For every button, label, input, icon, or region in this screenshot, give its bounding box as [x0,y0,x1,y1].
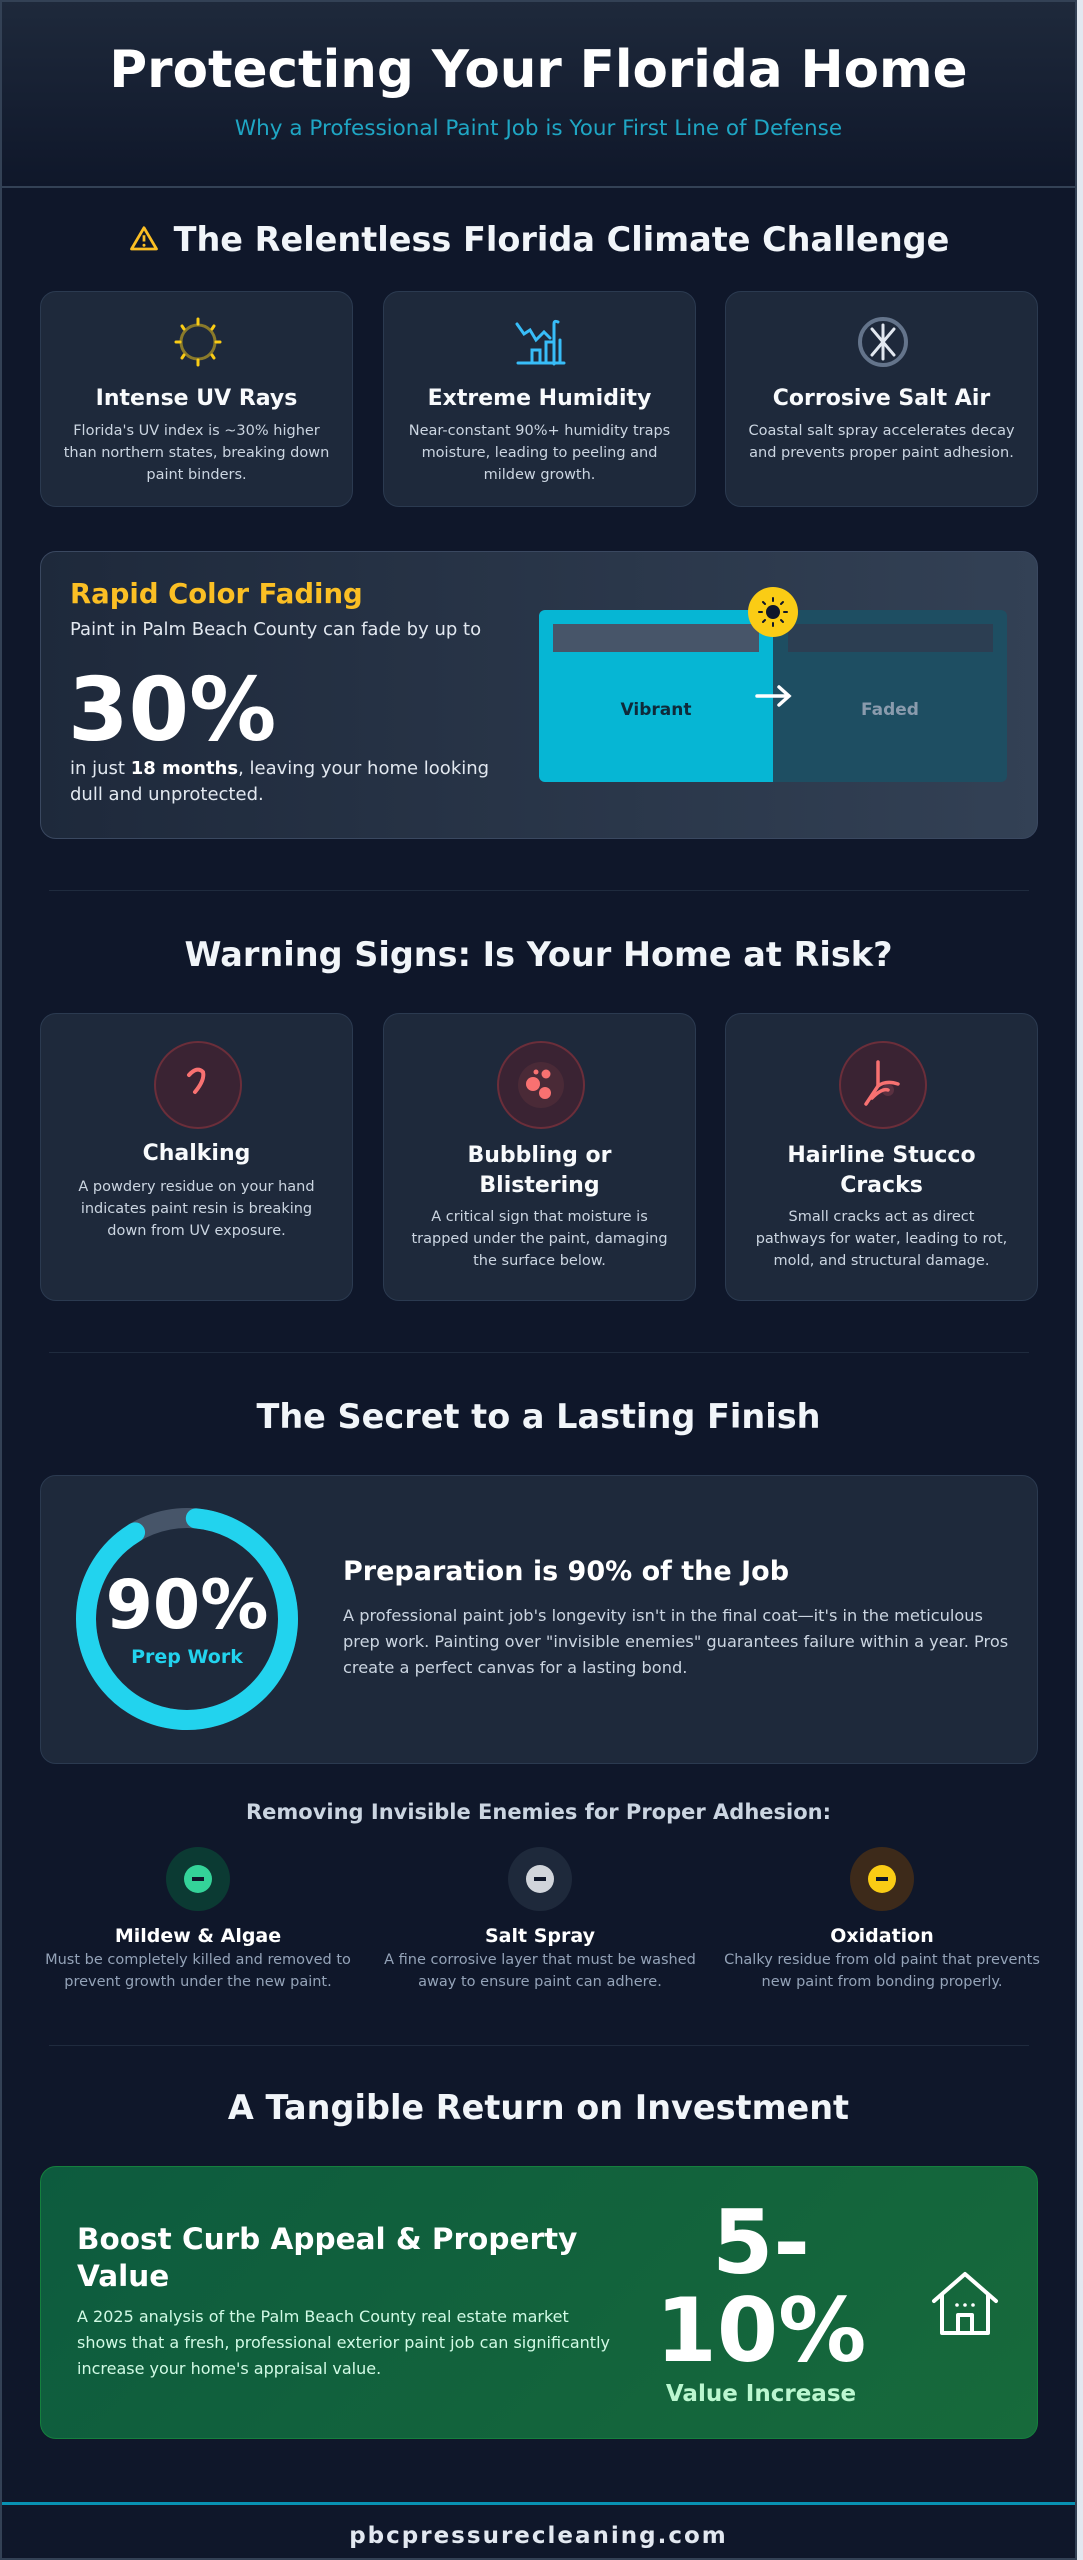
icon: green minus [166,1847,230,1911]
icon: sun badge [748,587,798,637]
label vibrant: Vibrant [621,700,691,720]
donut chart 90%: Prep Work [131,1646,243,1668]
donut chart 90% [76,1508,298,1730]
icon: crack [839,1041,927,1129]
footer: pbcpressurecleaning.com [349,2523,728,2549]
ROI paragraph: A 2025 analysis of the Palm Beach County real estate market shows that a fresh, professional exterior paint job can significantly increase your home's appraisal value. [77,2307,610,2378]
donut label: 90% [106,1566,268,1645]
card: salt air [725,291,1038,507]
card: bubbling: Blistering [479,1173,600,1198]
subtitle: Why a Professional Paint Job is Your First Line of Defense [235,116,842,141]
heading: ROI: A Tangible Return on Investment [228,2088,849,2127]
color swatch comparison [539,587,1007,782]
enemy: salt spray: Salt Spray [485,1925,595,1947]
heading: climate challenge: The Relentless Florida Climate Challenge [174,220,949,259]
subheading: invisible enemies: Removing Invisible Enemies for Proper Adhesion: [246,1800,831,1824]
enemy: oxidation [724,1847,1040,1990]
fading heading: Rapid Color Fading [70,578,363,610]
big stat 5-10%: Value Increase [666,2381,856,2407]
footer [2,2502,1075,2560]
card: salt air: Coastal salt spray accelerates decay and prevents proper paint adhesion. [748,423,1015,461]
icon: gray minus [508,1847,572,1911]
enemy: oxidation: Oxidation [830,1925,934,1947]
card: bubbling: Bubbling or [467,1143,612,1168]
big stat 5-10% [656,2191,866,2407]
big stat 5-10%: 10% [656,2279,866,2382]
icon: yellow minus [850,1847,914,1911]
enemy: mildew: Mildew & Algae [115,1925,281,1947]
enemy: mildew [45,1847,351,1990]
panel: rapid color fading [40,551,1038,839]
icon: salt crystal [858,317,908,367]
icon: sun [174,318,222,366]
card: chalking: A powdery residue on your hand indicates paint resin is breaking down from UV exposure. [78,1179,315,1239]
ROI heading: Boost Curb Appeal & Property Value [77,2222,577,2293]
prep heading: Preparation is 90% of the Job [343,1556,789,1587]
card: humidity: Near-constant 90%+ humidity traps moisture, leading to peeling and mildew growth. [409,423,670,483]
icon: bubbles [497,1041,585,1129]
title: Protecting Your Florida Home [109,40,968,100]
icon: chalking [154,1041,242,1129]
card: humidity: Extreme Humidity [428,386,651,411]
card: humidity [383,291,696,507]
card: bubbling: A critical sign that moisture is trapped under the paint, damaging the surface below. [411,1209,668,1269]
card: chalking [40,1013,353,1301]
enemy: mildew: Must be completely killed and removed to prevent growth under the new paint. [45,1952,351,1990]
big stat 30%: 30% [68,659,276,761]
icon: house [932,2272,998,2335]
heading: warning signs: Warning Signs: Is Your Home at Risk? [184,935,892,974]
card: UV: Florida's UV index is ~30% higher than northern states, breaking down paint binders. [64,423,329,483]
prep paragraph: A professional paint job's longevity isn't in the final coat—it's in the meticulous prep work. Painting over "invisible enemies" guarantees failure within a year. Pros create a perfect canvas for a lasting bond. [343,1606,1008,1677]
header [2,2,1075,188]
card: bubbling [383,1013,696,1301]
enemy: salt spray: A fine corrosive layer that must be washed away to ensure paint can adhere. [384,1952,696,1990]
panel: preparation [40,1475,1038,1764]
arrow [755,685,792,707]
card: cracks [725,1013,1038,1301]
card: cracks: pathways for water, leading to rot, [756,1231,1007,1247]
card: salt air: Corrosive Salt Air [773,386,990,411]
big stat 5-10%: 5- [712,2191,810,2294]
card: cracks: mold, and structural damage. [774,1253,989,1269]
icon: humidity chart [515,320,566,366]
heading: secret: The Secret to a Lasting Finish [256,1397,821,1436]
enemy: salt spray [384,1847,696,1990]
card: cracks: Small cracks act as direct [789,1209,974,1225]
card: UV [40,291,353,507]
fading detail text: in just 18 months, leaving your home looking dull and unprotected. [70,758,489,805]
label faded: Faded [861,700,919,720]
panel: ROI [40,2166,1038,2439]
card: cracks: Hairline Stucco [787,1143,976,1168]
enemy: oxidation: Chalky residue from old paint that prevents new paint from bonding properly. [724,1952,1040,1990]
card: chalking: Chalking [143,1141,250,1166]
card: cracks: Cracks [840,1173,923,1198]
card: UV: Intense UV Rays [96,386,297,411]
fading intro text: Paint in Palm Beach County can fade by up to [70,619,481,640]
